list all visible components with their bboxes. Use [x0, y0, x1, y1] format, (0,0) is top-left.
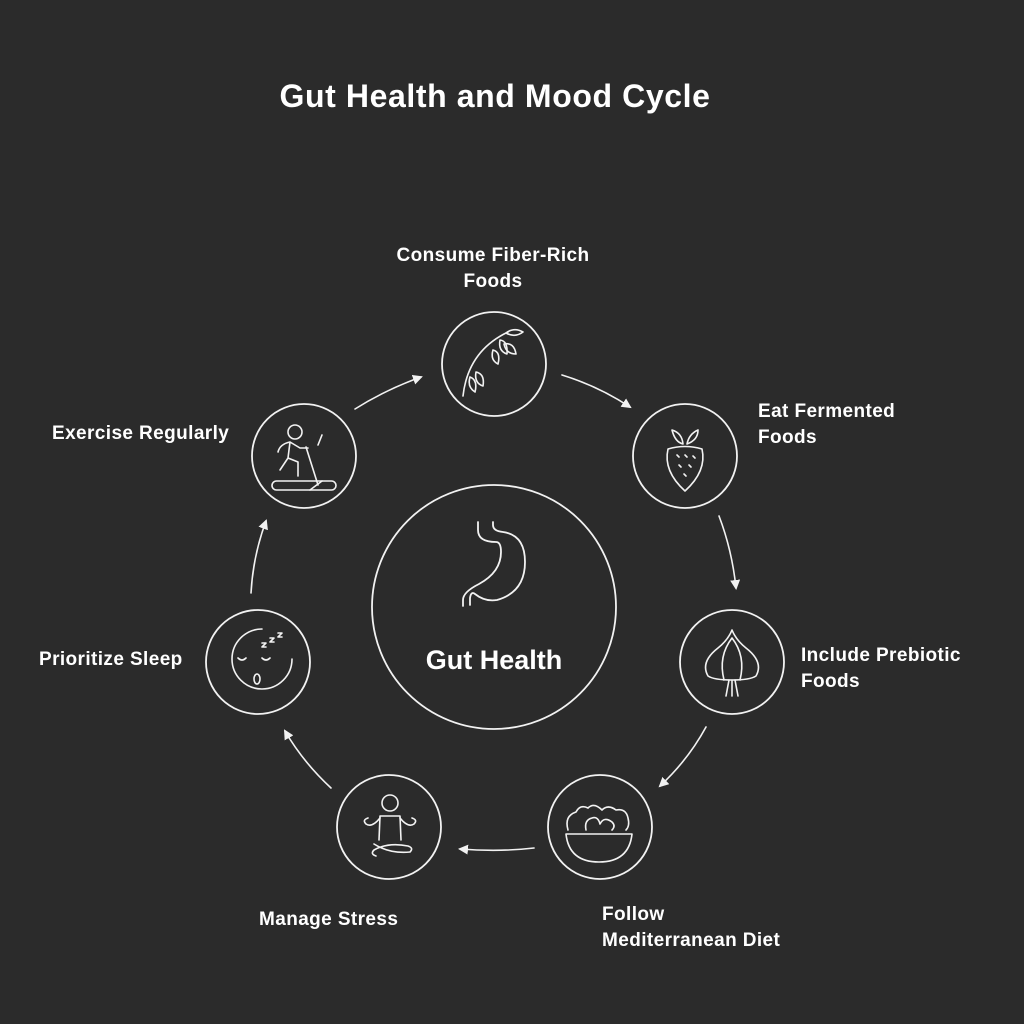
label: fiber	[396, 245, 590, 292]
label: fiber: Foods	[464, 271, 522, 292]
node: mediterranean	[548, 775, 652, 879]
title: Gut Health and Mood Cycle	[279, 78, 711, 114]
center circle: gut health	[372, 485, 616, 729]
label: fermented: Eat Fermented	[758, 401, 895, 422]
node: stress	[337, 775, 441, 879]
node: exercise	[252, 404, 356, 508]
label: stress: Manage Stress	[259, 909, 398, 930]
node: prebiotic	[680, 610, 784, 714]
label: mediterranean: Follow	[602, 904, 665, 925]
label: mediterranean	[602, 904, 780, 951]
node: fiber	[442, 312, 546, 416]
icon: stomach	[463, 522, 525, 606]
label: fermented	[758, 401, 895, 448]
arrows	[251, 375, 736, 850]
label: prebiotic	[801, 645, 961, 692]
label: fermented: Foods	[758, 427, 817, 448]
label: mediterranean: Mediterranean Diet	[602, 930, 780, 951]
node: sleep	[206, 610, 310, 714]
label: prebiotic: Foods	[801, 671, 860, 692]
label: fiber: Consume Fiber-Rich	[396, 245, 590, 266]
label: prebiotic: Include Prebiotic	[801, 645, 961, 666]
label: exercise: Exercise Regularly	[52, 423, 229, 444]
label: sleep: Prioritize Sleep	[39, 649, 183, 670]
center circle: gut health: Gut Health	[426, 645, 562, 675]
node: fermented	[633, 404, 737, 508]
